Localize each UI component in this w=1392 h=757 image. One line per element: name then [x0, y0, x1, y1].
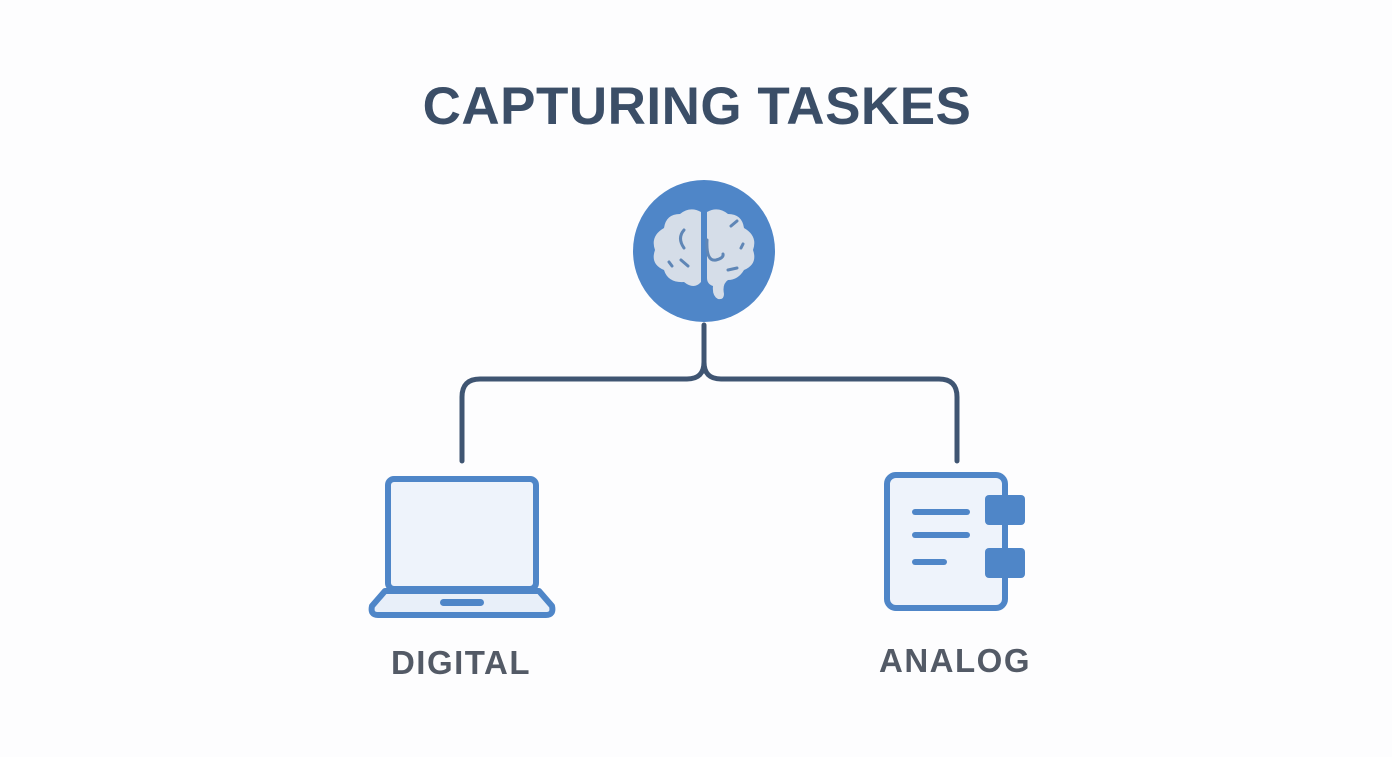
icon: brain [633, 180, 775, 322]
title: CAPTURING TASKES [423, 77, 971, 136]
icon: notebook [887, 475, 1025, 608]
label: digital: DIGITAL [391, 644, 531, 681]
icon: laptop [372, 479, 552, 615]
label: analog: ANALOG [879, 642, 1031, 679]
connector arrows [462, 325, 957, 461]
